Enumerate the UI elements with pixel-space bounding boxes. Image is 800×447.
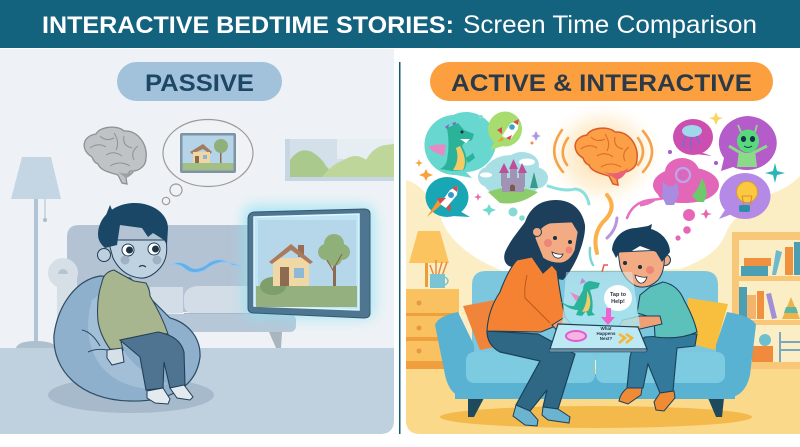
tap target [566,331,586,341]
story prompt: Next? [600,336,612,341]
bookshelf [732,232,800,369]
title banner: Screen Time Comparison [463,11,757,39]
bubble: dragon [424,112,496,178]
bubble: alien [719,116,777,171]
feet [513,405,570,426]
head [98,203,168,278]
thought bubble [162,120,253,205]
screen light wave [171,260,241,273]
hand [107,348,124,365]
brain activity arcs [554,130,652,172]
title banner [0,0,800,48]
television with glow [244,206,374,318]
brain glow [541,99,665,211]
sofa: active [435,271,756,428]
legs [487,331,575,411]
floor lamp [11,157,61,348]
window with hills [285,139,394,181]
child on beanbag [48,203,214,413]
label: active [430,62,773,101]
legs [627,334,697,393]
hair [504,200,585,280]
cloud: castle [478,152,548,204]
bubble: green rocket [488,112,522,150]
story prompt: Happens [596,331,616,336]
shirt [637,282,697,338]
flowing imagination streams [548,186,672,265]
legs [120,332,185,390]
bubble: lightbulb [719,173,770,219]
story prompt: What [600,326,612,331]
brain: passive [84,127,146,184]
tablet dragon [559,278,600,316]
hand [552,317,578,338]
torso and arm [487,257,565,332]
cloud: characters [640,158,719,205]
panel: passive [0,49,394,434]
sparkles and dots [415,112,785,241]
story prompt [596,326,616,341]
floor [0,348,394,434]
beanbag [48,276,214,413]
bubble: jellyfish [673,119,713,156]
head [660,254,670,266]
tablet with story hologram [549,265,647,352]
bubble: teal rocket [426,177,470,217]
table lamp and dresser [406,231,459,369]
mother [487,200,585,426]
title banner: INTERACTIVE BEDTIME STORIES: [42,12,454,39]
label: active: ACTIVE & INTERACTIVE [451,70,752,97]
music note [602,265,608,272]
speech bubble: tap to help: Help! [611,299,625,305]
pink arrow [601,308,615,325]
face [535,222,578,263]
arm [618,316,662,331]
label: passive [117,62,282,101]
chevrons [619,334,632,343]
feet [619,388,675,411]
sofa: passive [48,225,296,348]
divider [399,62,400,434]
socks [147,385,193,404]
label: passive: PASSIVE [145,70,254,97]
brain: active [575,128,637,185]
child [612,224,697,411]
hoodie [98,270,168,350]
panel: active [406,99,800,434]
floor [406,369,800,434]
speech bubble: tap to help [604,285,632,311]
speech bubble: tap to help: Tap to [610,292,627,298]
